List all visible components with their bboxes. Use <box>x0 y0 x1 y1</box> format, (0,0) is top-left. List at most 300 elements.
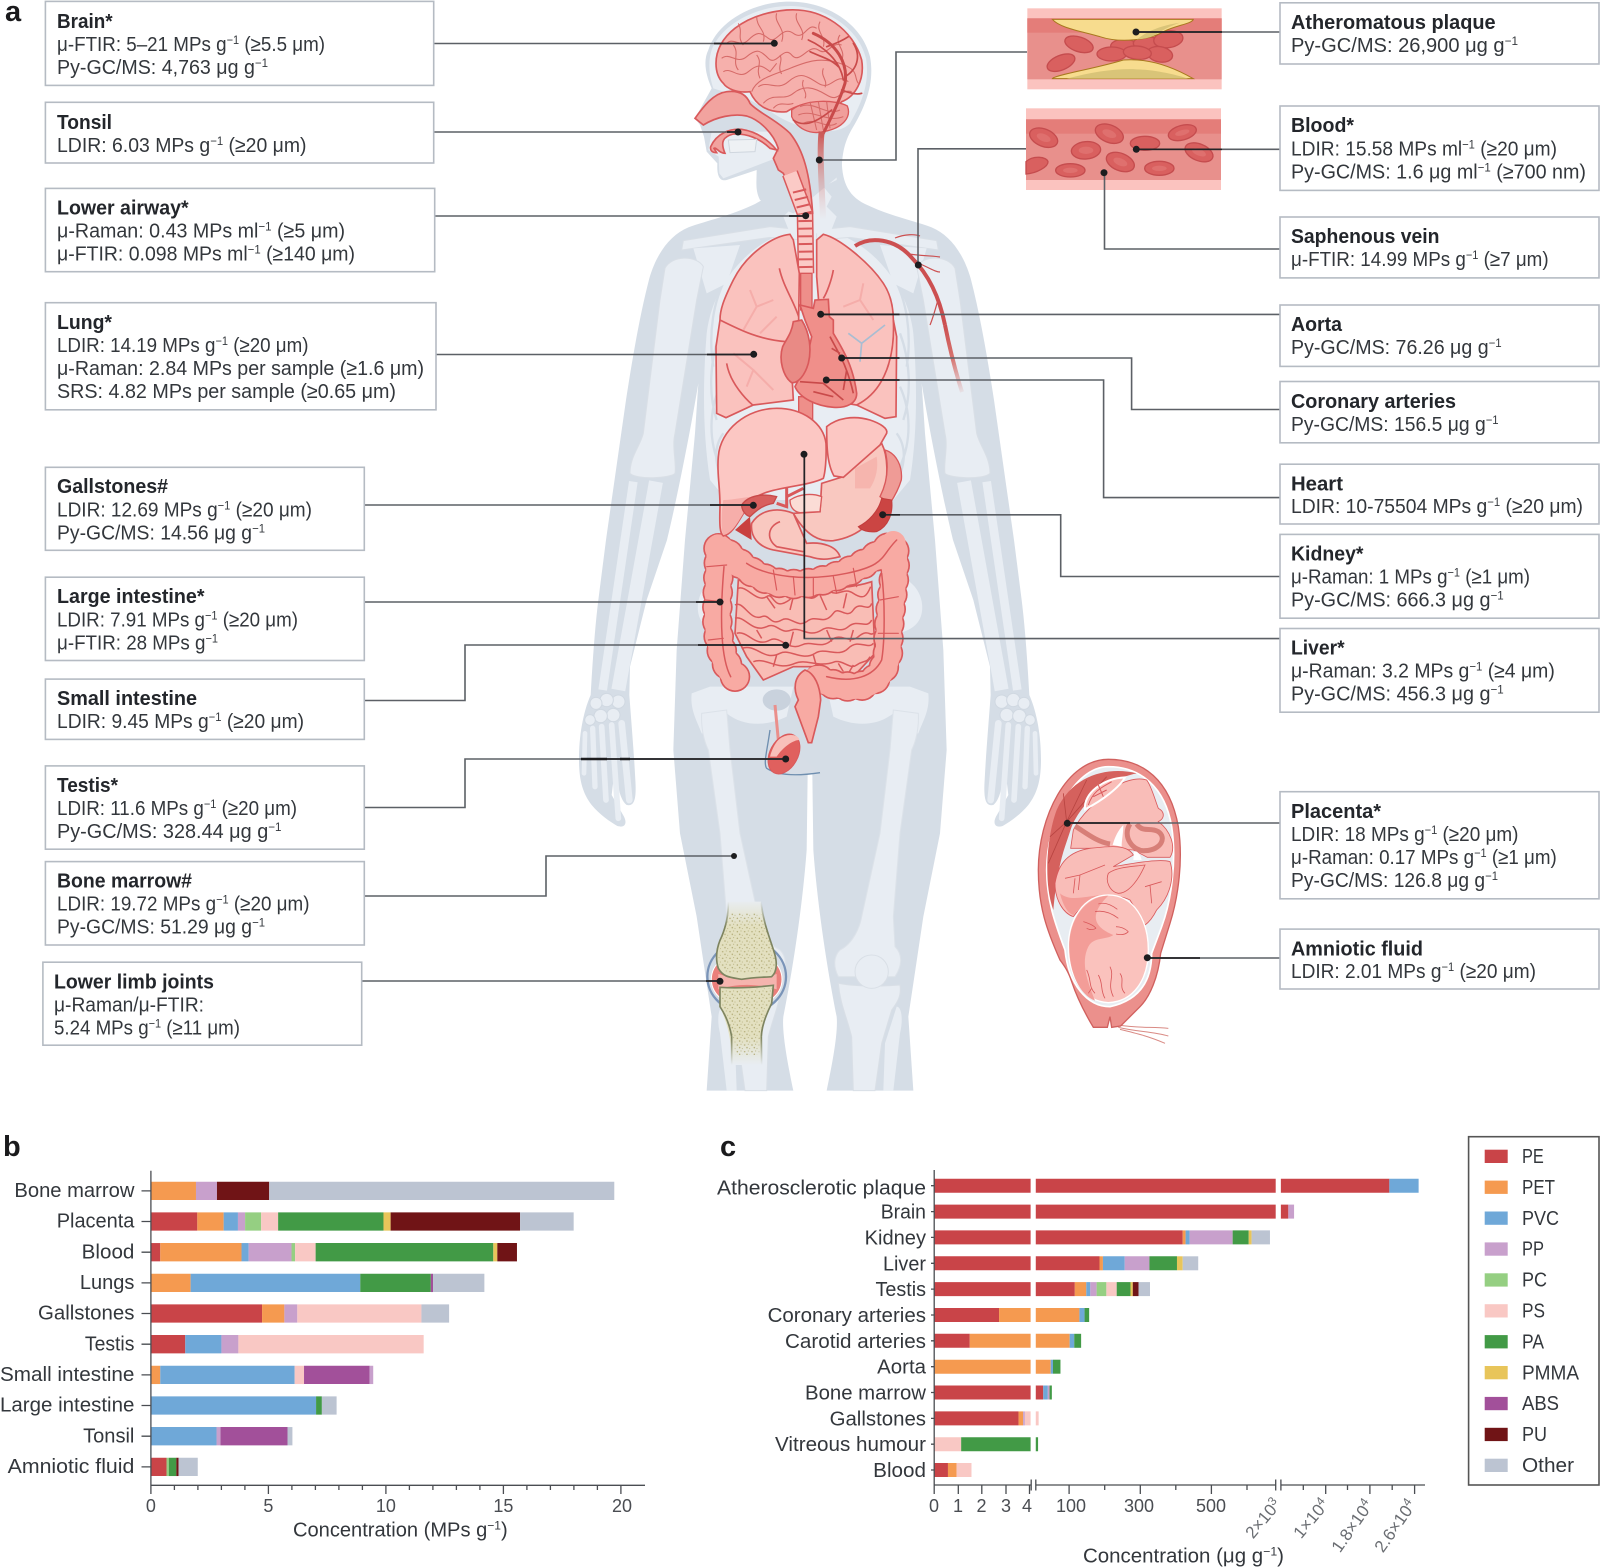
tick labels c: 500 <box>1196 1496 1226 1516</box>
tongue and palate <box>711 129 777 153</box>
values: lower airway: μ-Raman: 0.43 MPs ml <box>57 220 267 242</box>
values: lower airway: (≥5 μm) <box>272 220 345 242</box>
lung: image-left <box>716 234 799 418</box>
connector: blood <box>1136 148 1280 150</box>
values: liver: Py-GC/MS: 456.3 μg g <box>1291 682 1498 706</box>
values: brain: −1 <box>255 56 268 70</box>
tick labels b: 10 <box>376 1496 396 1516</box>
stomach fold shading <box>855 457 877 488</box>
bars c <box>934 1186 1419 1470</box>
connector: plaque vessel to carotid <box>819 52 1027 160</box>
values: placenta: (≥20 μm) <box>1437 823 1518 846</box>
values: testis: −1 <box>268 820 282 834</box>
connector: amniotic fluid <box>1147 957 1280 959</box>
amniotic cavity <box>1047 767 1174 1007</box>
panel letter c: c <box>720 1131 736 1163</box>
limb creases <box>1065 865 1162 903</box>
values: kidney: −1 <box>1490 588 1504 602</box>
vessel panel: blood <box>1026 108 1221 190</box>
values: kidney: Py-GC/MS: 666.3 μg g <box>1291 588 1498 612</box>
values: lower limb joints: 5.24 MPs g <box>54 1016 158 1040</box>
values: blood: Py-GC/MS: 1.6 μg ml <box>1291 160 1485 184</box>
bar: bone marrow <box>151 1182 614 1200</box>
heading: lower limb joints: Lower limb joints <box>54 970 214 994</box>
connector: atheromatous plaque <box>1136 31 1280 33</box>
axes c with breaks <box>931 1170 1425 1494</box>
bar chart c: mass concentration <box>717 1170 1425 1567</box>
duodenum and bile duct <box>751 487 840 559</box>
category labels b: Tonsil <box>83 1425 134 1447</box>
values: kidney: μ-Raman: 1 MPs g <box>1291 566 1462 588</box>
connector: liver <box>804 454 1280 639</box>
values: atheromatous plaque: −1 <box>1505 34 1518 48</box>
callout: kidney <box>1280 534 1599 618</box>
connector: lung <box>436 354 754 356</box>
body silhouette: right half <box>810 157 1041 1091</box>
values: bone marrow: (≥20 μm) <box>229 892 310 916</box>
values: atheromatous plaque: Py-GC/MS: 26,900 μg g <box>1291 34 1509 57</box>
tick labels b: 20 <box>612 1496 632 1516</box>
legend labels: Other <box>1522 1455 1574 1477</box>
tick labels c: 100 <box>1056 1496 1086 1516</box>
inferior vessel <box>735 517 752 540</box>
legend <box>1469 1137 1599 1485</box>
tick labels c <box>929 1496 1226 1516</box>
values: gallstones: −1 <box>218 498 231 512</box>
callout: testis <box>45 766 364 849</box>
category labels c: Aorta <box>877 1357 927 1379</box>
callout: gallstones <box>45 467 364 550</box>
heading: small intestine: Small intestine <box>57 687 197 710</box>
legend labels: PVC <box>1522 1208 1559 1230</box>
legend labels: ABS <box>1522 1393 1559 1415</box>
artery at the shoulder <box>855 235 962 392</box>
legend labels: PC <box>1522 1270 1547 1292</box>
values: testis: (≥20 μm) <box>216 797 297 820</box>
jaw <box>708 132 780 178</box>
rotated tick labels c: 4 <box>1399 1495 1415 1509</box>
legend labels: PP <box>1522 1239 1544 1261</box>
head silhouette <box>695 2 871 213</box>
liver left lobe <box>827 418 887 477</box>
bar: gallstones <box>934 1411 1039 1425</box>
values: large intestine: μ-FTIR: 28 MPs g <box>57 632 219 654</box>
callout: lower airway <box>45 188 435 272</box>
rotated tick labels c: 4 <box>1356 1495 1372 1509</box>
values: bone marrow: Py-GC/MS: 51.29 μg g <box>57 916 264 938</box>
values: lung: μ-Raman: 2.84 MPs per sample (≥1.6 μm) <box>57 357 424 380</box>
callout: bone marrow <box>45 862 364 945</box>
tick labels b: 0 <box>146 1496 156 1516</box>
small intestine <box>735 580 875 680</box>
values: aorta: Py-GC/MS: 76.26 μg g <box>1291 336 1498 359</box>
connector: kidney <box>883 515 1280 576</box>
values: tonsil: −1 <box>210 134 223 148</box>
tick labels c: 3 <box>1001 1496 1011 1516</box>
liver <box>718 408 826 536</box>
heading: bone marrow: Bone marrow# <box>57 870 193 892</box>
values: small intestine: (≥20 μm) <box>222 710 304 733</box>
lung: image-right <box>817 234 897 418</box>
values: heart: (≥20 μm) <box>1500 495 1583 518</box>
rotated tick labels c: 2×10 <box>1242 1500 1281 1542</box>
fetal torso and arms <box>1055 847 1172 925</box>
rotated tick labels c: 1.8×10 <box>1328 1502 1373 1556</box>
values: bone marrow <box>57 892 310 938</box>
values: heart: −1 <box>1487 495 1500 509</box>
values: brain: Py-GC/MS: 4,763 μg g <box>57 56 264 79</box>
values: aorta: −1 <box>1489 336 1502 350</box>
bars b <box>151 1191 614 1467</box>
tick labels b: 15 <box>493 1496 513 1516</box>
legend labels: PU <box>1522 1424 1547 1446</box>
bar: kidney <box>934 1230 1270 1244</box>
values: tonsil: LDIR: 6.03 MPs g <box>57 134 219 157</box>
bar: liver <box>934 1256 1198 1270</box>
values: testis: Py-GC/MS: 328.44 μg g <box>57 820 275 843</box>
fetal legs <box>1071 779 1173 857</box>
tick labels c: 2 <box>976 1496 987 1516</box>
bar: amniotic fluid <box>151 1458 198 1476</box>
heading: tonsil: Tonsil <box>57 111 112 134</box>
legend labels <box>1522 1146 1580 1477</box>
descending aorta <box>799 273 813 421</box>
values: liver: μ-Raman: 3.2 MPs g <box>1291 660 1479 682</box>
category labels c: Carotid arteries <box>785 1331 926 1353</box>
category labels c: Brain <box>881 1202 926 1224</box>
values: lung: (≥20 μm) <box>228 334 308 357</box>
heading: large intestine: Large intestine* <box>57 585 205 608</box>
values: liver: −1 <box>1469 660 1483 674</box>
tick labels b <box>146 1496 632 1516</box>
callout: atheromatous plaque <box>1280 3 1599 64</box>
heading: blood: Blood* <box>1291 114 1354 137</box>
values: blood: −1 <box>1462 138 1475 152</box>
category labels b: Placenta <box>57 1211 135 1233</box>
testis and scrotum <box>762 705 820 779</box>
callout: coronary arteries <box>1280 382 1599 443</box>
category labels b: Lungs <box>80 1272 134 1294</box>
category labels c: Atherosclerotic plaque <box>717 1178 926 1200</box>
values: saphenous vein: (≥7 μm) <box>1478 248 1549 271</box>
values: blood: LDIR: 15.58 MPs ml <box>1291 138 1474 160</box>
heading: kidney: Kidney* <box>1291 542 1364 566</box>
connector: lower airway <box>435 215 806 217</box>
heart <box>781 299 857 407</box>
values: liver: −1 <box>1490 682 1504 696</box>
values: testis: LDIR: 11.6 MPs g <box>57 797 217 820</box>
values: blood: −1 <box>1478 160 1491 174</box>
connector: coronary arteries <box>842 358 1280 410</box>
category labels b: Testis <box>85 1333 134 1355</box>
skull <box>709 6 867 131</box>
values: gallstones: −1 <box>252 522 265 536</box>
legend swatches <box>1485 1150 1508 1472</box>
legend labels: PS <box>1522 1300 1545 1322</box>
values: lower airway: −1 <box>258 220 272 234</box>
category labels c: Testis <box>876 1279 926 1301</box>
values: placenta: −1 <box>1474 846 1487 860</box>
category labels c: Coronary arteries <box>768 1305 926 1327</box>
umbilical cord <box>1075 824 1162 851</box>
tick labels c: 4 <box>1022 1496 1032 1516</box>
category labels b <box>0 1180 135 1478</box>
tick labels c: 0 <box>929 1496 939 1516</box>
values: lung: SRS: 4.82 MPs per sample (≥0.65 μm) <box>57 380 396 403</box>
carotid vessel in the neck <box>821 132 823 223</box>
values: testis <box>57 797 297 843</box>
connector: bone marrow <box>364 856 734 896</box>
values: small intestine: LDIR: 9.45 MPs g <box>57 710 219 733</box>
nasal cavity and pharynx <box>695 91 813 213</box>
category labels b: Large intestine <box>0 1395 134 1417</box>
connector end dots <box>716 28 1151 985</box>
values: lower limb joints: −1 <box>149 1016 161 1030</box>
callout: tonsil <box>45 102 434 163</box>
bar: aorta <box>934 1360 1060 1374</box>
heading: heart: Heart <box>1291 472 1343 496</box>
placenta <box>1047 771 1137 910</box>
white gaps around the limbs <box>1113 825 1142 860</box>
values: lung: LDIR: 14.19 MPs g <box>57 334 230 357</box>
values: lower airway: (≥140 μm) <box>261 242 355 266</box>
values: coronary arteries: −1 <box>1486 413 1499 427</box>
values: large intestine: LDIR: 7.91 MPs g <box>57 608 219 632</box>
rotated tick labels c <box>1240 1494 1420 1556</box>
callout: amniotic fluid <box>1280 929 1599 989</box>
values: small intestine: −1 <box>209 710 222 724</box>
teeth <box>728 139 757 153</box>
connector: blood vessel to arm <box>918 149 1026 265</box>
heading: placenta: Placenta* <box>1291 800 1381 823</box>
bar: atherosclerotic plaque <box>934 1179 1419 1193</box>
values: coronary arteries: Py-GC/MS: 156.5 μg g <box>1291 413 1498 436</box>
connector: gallstones <box>364 504 753 506</box>
axis title b: Concentration (MPs g <box>293 1520 486 1542</box>
callout: placenta <box>1280 792 1599 899</box>
bar chart b: MPs concentration <box>0 1171 645 1542</box>
values: large intestine <box>57 608 298 654</box>
values: amniotic fluid: LDIR: 2.01 MPs g <box>1291 960 1453 983</box>
pancreas <box>790 494 822 513</box>
heading: testis: Testis* <box>57 774 118 797</box>
values: brain <box>57 33 325 79</box>
callout: aorta <box>1280 305 1599 366</box>
callout: lower limb joints <box>43 962 362 1045</box>
liver shading <box>722 497 757 535</box>
face shading <box>1069 896 1113 1001</box>
values: saphenous vein: μ-FTIR: 14.99 MPs g <box>1291 248 1482 271</box>
knee joint cross-section <box>707 902 786 1065</box>
values: bone marrow: LDIR: 19.72 MPs g <box>57 892 230 916</box>
category labels b: Blood <box>82 1241 134 1263</box>
vessel panel: atheromatous plaque <box>1027 8 1222 89</box>
category labels c <box>717 1178 927 1482</box>
values: testis: −1 <box>204 797 217 811</box>
gallbladder <box>742 495 777 517</box>
bar: placenta <box>151 1212 574 1231</box>
values: liver <box>1291 660 1555 706</box>
values: blood <box>1291 138 1586 184</box>
axes b <box>142 1171 645 1494</box>
category labels b: Amniotic fluid <box>8 1456 134 1478</box>
values: placenta: −1 <box>1425 823 1438 837</box>
heading: coronary arteries: Coronary arteries <box>1291 390 1456 413</box>
dark dashes at the hand <box>581 758 630 760</box>
tick labels c: 300 <box>1124 1496 1154 1516</box>
axis title b: −1 <box>487 1519 501 1533</box>
heading: aorta: Aorta <box>1291 313 1343 336</box>
connector: brain <box>434 42 774 44</box>
values: brain: μ-FTIR: 5–21 MPs g <box>57 33 242 56</box>
rotated tick labels c: 1×10 <box>1290 1500 1329 1542</box>
callout: liver <box>1280 628 1599 712</box>
values: lower limb joints <box>54 994 240 1040</box>
values: heart: LDIR: 10-75504 MPs g <box>1291 495 1500 518</box>
values: bone marrow: −1 <box>252 916 265 930</box>
rotated tick labels c: 3 <box>1265 1494 1280 1508</box>
fetal fist <box>1107 865 1145 893</box>
values: gallstones: Py-GC/MS: 14.56 μg g <box>57 522 264 544</box>
values: placenta: LDIR: 18 MPs g <box>1291 823 1436 846</box>
heading: amniotic fluid: Amniotic fluid <box>1291 938 1423 960</box>
bar: blood <box>151 1243 517 1261</box>
connector: testis <box>364 759 786 808</box>
values: gallstones: (≥20 μm) <box>230 498 312 522</box>
axis title c: −1 <box>1263 1545 1278 1559</box>
heading: lower airway: Lower airway* <box>57 196 189 220</box>
values: large intestine: (≥20 μm) <box>218 608 298 632</box>
human body illustration <box>579 2 1041 1091</box>
bar: small intestine <box>151 1366 373 1384</box>
tick labels b: 5 <box>263 1496 273 1516</box>
face and hair lines <box>1083 903 1128 998</box>
bar: gallstones <box>151 1304 449 1323</box>
connector: saphenous vein <box>1104 173 1280 249</box>
values: lower limb joints: (≥11 μm) <box>161 1016 240 1040</box>
values: lower airway: μ-FTIR: 0.098 MPs ml <box>57 242 258 266</box>
connector: tonsil <box>434 131 738 133</box>
values: brain: (≥5.5 μm) <box>239 33 325 56</box>
values: kidney <box>1291 566 1530 612</box>
callout: blood <box>1280 106 1599 190</box>
category labels b: Gallstones <box>38 1303 134 1325</box>
connector: large intestine <box>364 601 720 603</box>
bar: coronary arteries <box>934 1308 1089 1322</box>
stomach <box>793 443 887 541</box>
values: amniotic fluid: (≥20 μm) <box>1454 960 1536 983</box>
category labels c: Bone marrow <box>805 1382 927 1404</box>
fetus in uterus illustration <box>1038 759 1180 1043</box>
shading on the torso <box>1060 893 1102 915</box>
category labels c: Liver <box>883 1253 926 1275</box>
values: large intestine: −1 <box>205 608 218 622</box>
tick labels c: 1 <box>953 1496 963 1516</box>
legend labels: PET <box>1522 1177 1555 1199</box>
connector: placenta <box>1067 822 1280 824</box>
legend labels: PE <box>1522 1146 1544 1168</box>
values: placenta <box>1291 823 1557 892</box>
callout: lung <box>45 303 436 410</box>
heading: atheromatous plaque: Atheromatous plaque <box>1291 11 1496 34</box>
heading: gallstones: Gallstones# <box>57 475 169 498</box>
values: placenta: Py-GC/MS: 126.8 μg g <box>1291 869 1498 892</box>
axis title b: ) <box>501 1520 508 1542</box>
values: bone marrow: −1 <box>216 892 229 906</box>
bar: large intestine <box>151 1396 337 1415</box>
values: brain: −1 <box>227 33 239 47</box>
values: lower airway: −1 <box>248 242 261 256</box>
connector: heart <box>826 380 1280 498</box>
values: gallstones: LDIR: 12.69 MPs g <box>57 498 230 522</box>
uterine wall <box>1038 759 1180 1027</box>
values: blood: (≥20 μm) <box>1475 138 1557 160</box>
values: gallstones <box>57 498 312 544</box>
placental vessels <box>1048 777 1107 863</box>
bladder <box>763 689 791 711</box>
bar: carotid arteries <box>934 1334 1081 1348</box>
values: placenta: (≥1 μm) <box>1487 846 1557 869</box>
category labels c: Gallstones <box>830 1408 926 1430</box>
category labels c: Blood <box>873 1460 926 1482</box>
callout: small intestine <box>45 679 364 739</box>
values: blood: (≥700 nm) <box>1491 160 1586 184</box>
bar: brain <box>934 1205 1294 1219</box>
fetal head <box>1068 895 1148 1003</box>
callout: heart <box>1280 464 1599 524</box>
bar: testis <box>151 1335 424 1353</box>
rectum <box>795 670 821 743</box>
values: liver: (≥4 μm) <box>1482 660 1555 682</box>
umbilical cord at cervix <box>1118 1025 1168 1043</box>
legend labels: PA <box>1522 1331 1545 1353</box>
heading: lung: Lung* <box>57 311 112 334</box>
trachea and lower airway <box>790 173 806 273</box>
category labels b: Small intestine <box>0 1364 134 1386</box>
large intestine <box>705 540 898 687</box>
bar: tonsil <box>151 1427 292 1445</box>
rotated tick labels c: 4 <box>1313 1494 1328 1508</box>
rotated tick labels c: 2.6×10 <box>1371 1502 1416 1556</box>
callout: saphenous vein <box>1280 217 1599 278</box>
values: kidney: −1 <box>1448 566 1460 580</box>
values: lower limb joints: μ-Raman/μ-FTIR: <box>54 994 204 1016</box>
panel letter b: b <box>3 1131 21 1163</box>
bar: blood <box>934 1463 971 1477</box>
bar: vitreous humour <box>934 1437 1038 1451</box>
category labels b: Bone marrow <box>14 1180 135 1202</box>
values: tonsil: (≥20 μm) <box>223 134 306 157</box>
spleen <box>880 450 902 503</box>
bar: lungs <box>151 1274 484 1292</box>
fetal hand crescent <box>1085 777 1125 809</box>
callout: large intestine <box>45 577 364 660</box>
values: placenta: μ-Raman: 0.17 MPs g <box>1291 846 1491 869</box>
heading: liver: Liver* <box>1291 636 1345 660</box>
category labels c: Vitreous humour <box>775 1434 926 1456</box>
legend labels: PMMA <box>1522 1362 1580 1384</box>
connector: lower limb joints <box>362 980 720 982</box>
brain <box>716 10 862 137</box>
heading: brain: Brain* <box>57 10 113 33</box>
values: kidney: (≥1 μm) <box>1460 566 1530 588</box>
connector: aorta <box>821 313 1280 315</box>
body silhouette: left half <box>579 157 810 1091</box>
category labels c: Kidney <box>865 1227 926 1249</box>
values: placenta: −1 <box>1485 869 1498 883</box>
values: lung: −1 <box>215 334 228 348</box>
values: lung <box>57 334 424 403</box>
